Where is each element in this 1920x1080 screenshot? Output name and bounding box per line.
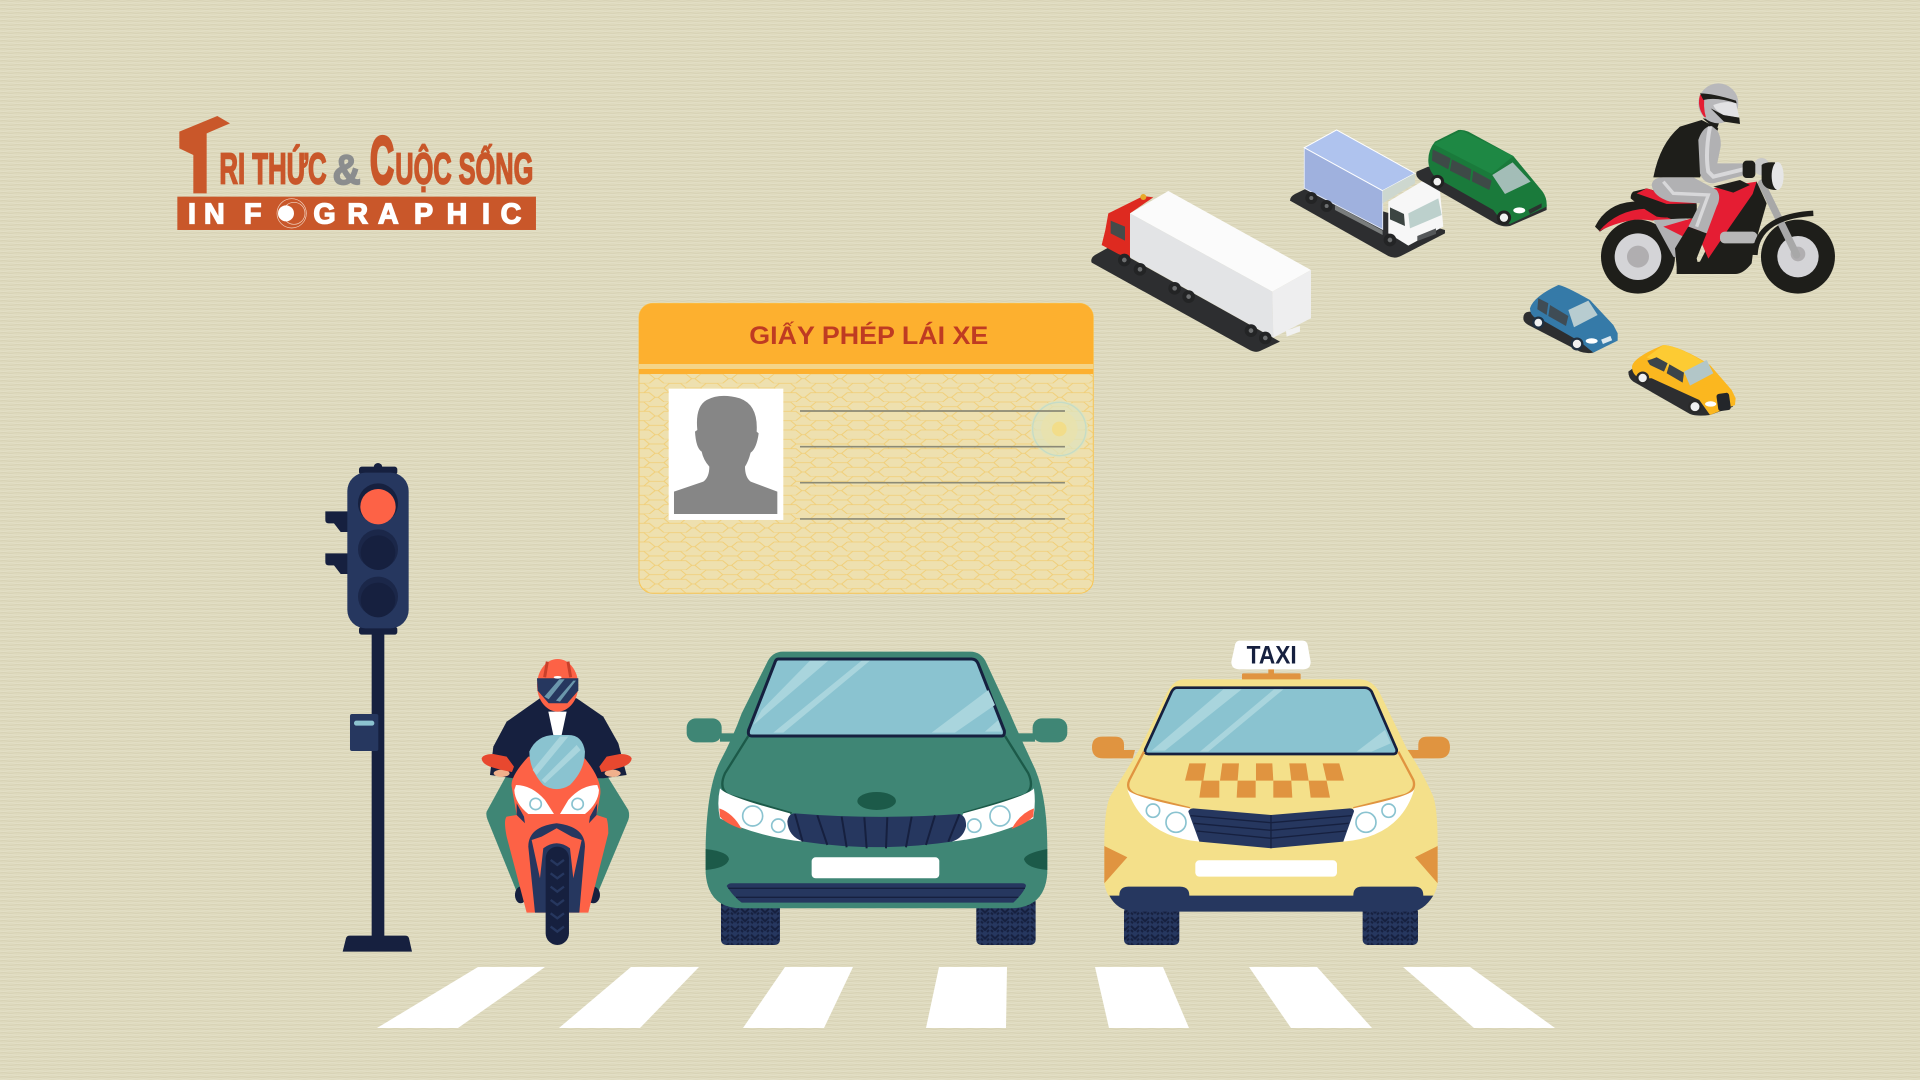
isometric truck group xyxy=(1091,130,1547,352)
windshield xyxy=(748,659,1004,736)
rider legs xyxy=(486,775,629,892)
windshield xyxy=(529,735,585,789)
logo T mark xyxy=(179,116,230,193)
green van xyxy=(1416,130,1547,226)
push button box xyxy=(350,714,378,751)
side mirrors xyxy=(687,718,1067,742)
helmet xyxy=(537,659,578,712)
headlights xyxy=(718,788,1035,842)
side vents xyxy=(517,803,597,823)
rider jacket xyxy=(490,698,627,778)
headlight xyxy=(1754,158,1770,175)
rider leg xyxy=(1652,177,1719,233)
traffic light xyxy=(325,463,412,952)
glove xyxy=(1743,161,1755,178)
boot xyxy=(1675,227,1707,267)
side mirrors xyxy=(1092,737,1450,758)
seal watermark xyxy=(1031,400,1088,458)
windshield xyxy=(1145,688,1397,754)
rear fender xyxy=(1595,202,1697,232)
yellow car xyxy=(1628,345,1736,416)
motorbike rider xyxy=(1595,83,1835,294)
licence plate xyxy=(1195,860,1337,877)
fog lamps xyxy=(706,849,1047,870)
hood line xyxy=(722,736,1031,813)
bumper xyxy=(1109,887,1433,912)
headlights xyxy=(1127,789,1414,842)
lower grille xyxy=(727,883,1026,903)
fairing xyxy=(505,757,608,913)
green car, front view xyxy=(687,652,1067,945)
logo infographic banner: INFOGRAPHIC xyxy=(188,199,521,231)
grille xyxy=(787,813,966,848)
logo wordmark: C xyxy=(370,124,394,198)
emblem xyxy=(857,792,896,810)
logo wordmark: RI THỨC xyxy=(219,143,327,193)
pole and base xyxy=(343,632,412,952)
card header band xyxy=(639,303,1093,374)
checker pattern xyxy=(1185,763,1344,798)
exhaust and fork xyxy=(1720,232,1757,243)
hood line xyxy=(1128,752,1414,808)
motorcycle with rider, front view xyxy=(482,659,632,945)
headlights xyxy=(514,785,599,814)
hands xyxy=(494,770,621,777)
logo wordmark: UỘC SỐNG xyxy=(395,142,533,193)
fork and wheel xyxy=(528,823,585,945)
taxi, front view xyxy=(1092,641,1450,945)
licence plate xyxy=(812,857,939,878)
seat xyxy=(1631,188,1697,217)
card text lines xyxy=(800,411,1065,519)
blue box truck xyxy=(1290,130,1445,258)
card body with security pattern xyxy=(639,303,1093,593)
helmet xyxy=(1698,83,1740,130)
rider arm xyxy=(1698,126,1745,183)
taxi roof sign xyxy=(1231,641,1311,680)
signal head xyxy=(325,463,409,635)
driving licence card xyxy=(639,303,1093,593)
logo wordmark: & xyxy=(333,146,361,193)
logo wordmark xyxy=(219,124,533,198)
card title: GIẤY PHÉP LÁI XE xyxy=(749,321,988,350)
rider torso xyxy=(1653,120,1718,177)
logo: Tri Thức & Cuộc Sống Infographic xyxy=(177,116,536,231)
tyres xyxy=(721,897,1036,945)
blue car xyxy=(1523,285,1618,353)
boots xyxy=(515,887,600,903)
isometric motorbike and cars group xyxy=(1523,83,1835,416)
taxi roof sign: TAXI xyxy=(1247,642,1297,669)
red cab trailer truck xyxy=(1091,191,1311,352)
zebra crossing xyxy=(377,967,1555,1028)
side reflectors xyxy=(1104,846,1438,883)
car body xyxy=(1104,679,1438,909)
grille xyxy=(1188,808,1354,848)
wheels xyxy=(1601,220,1835,294)
frame and engine xyxy=(1677,182,1767,274)
portrait photo xyxy=(669,389,783,520)
shirt xyxy=(548,712,567,735)
tyres xyxy=(1124,907,1418,945)
car body xyxy=(706,652,1047,908)
mirrors xyxy=(482,754,632,772)
